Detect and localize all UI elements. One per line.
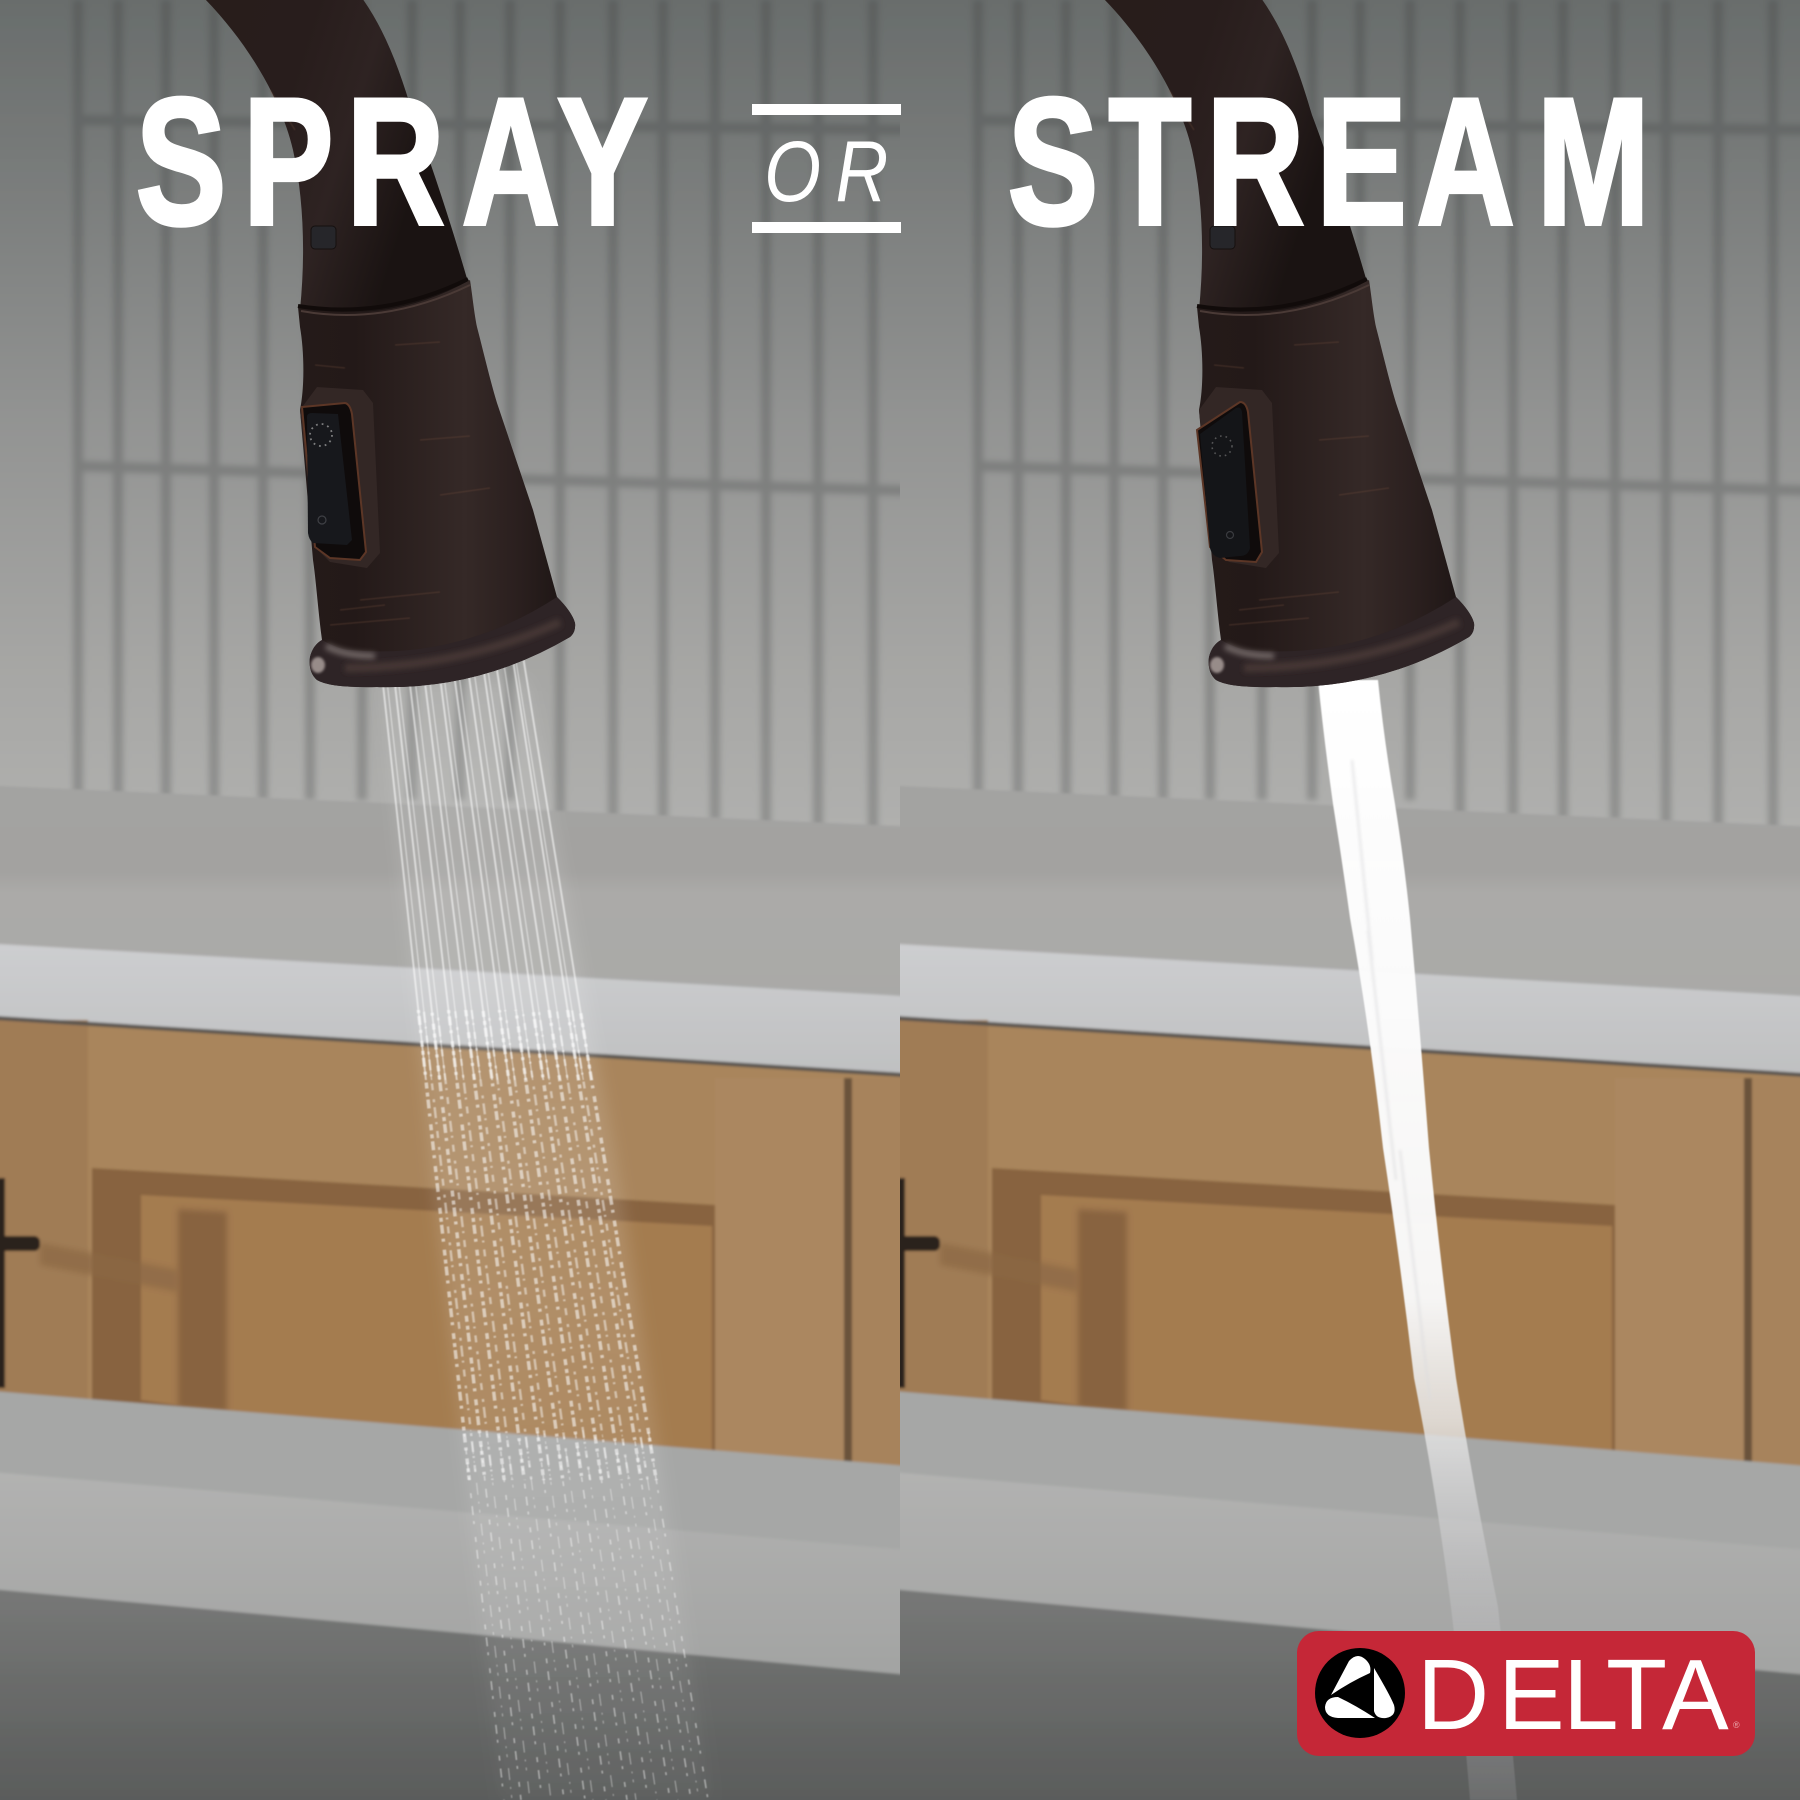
registered mark: ® <box>1733 1720 1740 1730</box>
water stream <box>1318 680 1517 1800</box>
heading: STREAM: STREAM <box>1008 60 1650 262</box>
icon: Delta triangle emblem <box>1315 1648 1405 1738</box>
divider: OR badge <box>752 104 901 233</box>
faucet: spray head <box>204 0 575 687</box>
wordmark: DELTA: DELTA <box>1417 1639 1729 1751</box>
faucet: stream head <box>1103 0 1474 687</box>
logo: Delta badge <box>1297 1631 1755 1756</box>
background: kitchen scene left <box>0 0 920 1800</box>
background: kitchen scene right <box>880 0 1800 1800</box>
panel: spray <box>0 0 920 1800</box>
word: OR: OR <box>764 123 888 219</box>
water spray <box>380 622 712 1800</box>
heading: SPRAY: SPRAY <box>136 60 648 262</box>
spray button: left <box>300 387 380 568</box>
panel: stream <box>880 0 1800 1800</box>
spray button: right <box>1197 387 1279 568</box>
